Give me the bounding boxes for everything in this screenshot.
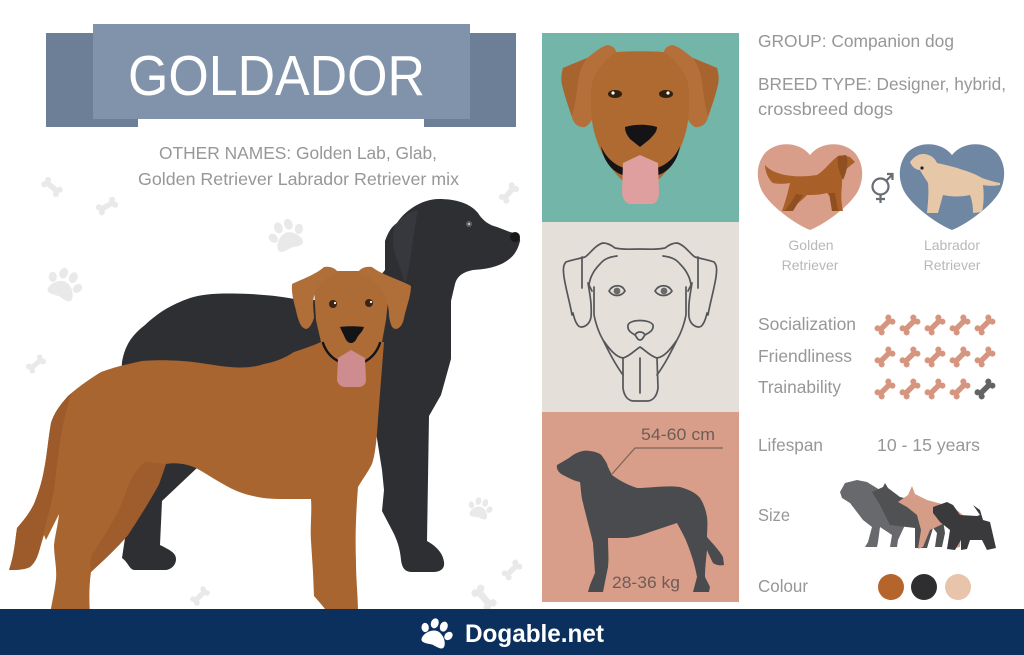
eye pupils xyxy=(614,288,667,294)
lifespan xyxy=(758,435,980,455)
tongue xyxy=(622,155,659,204)
breed type text: BREED TYPE: Designer, hybrid, xyxy=(758,74,1006,94)
large dog xyxy=(840,480,905,547)
panel: outline face xyxy=(542,222,739,412)
mouth xyxy=(323,343,380,362)
size row xyxy=(758,480,996,550)
trainability rating: Trainability xyxy=(758,377,841,397)
icon: male female symbol xyxy=(872,174,892,203)
tongue xyxy=(623,358,658,401)
head outline xyxy=(563,243,717,327)
lifespan: 10 - 15 years xyxy=(877,435,980,455)
nose xyxy=(510,232,520,242)
title banner xyxy=(46,24,516,127)
breed type text: crossbreed dogs xyxy=(758,99,893,119)
label xyxy=(924,237,981,273)
group text: GROUP: Companion dog xyxy=(758,31,954,51)
height leader line xyxy=(612,448,723,474)
second dog xyxy=(872,483,945,548)
ear folds xyxy=(582,256,698,291)
eyes xyxy=(329,299,373,308)
head xyxy=(314,271,389,364)
colour row: Colour xyxy=(758,576,808,596)
label xyxy=(782,237,839,273)
other names text: Golden Retriever Labrador Retriever mix xyxy=(138,169,459,189)
tongue xyxy=(337,350,366,387)
size row: Size xyxy=(758,505,790,525)
footer bar xyxy=(0,609,1024,655)
panel: size and weight xyxy=(542,412,739,602)
nose xyxy=(340,326,364,343)
icon: footer paw xyxy=(415,614,458,651)
height label: 54-60 cm xyxy=(641,425,715,444)
label: Retriever xyxy=(782,257,839,273)
friendliness rating: Friendliness xyxy=(758,346,852,366)
eye xyxy=(466,221,472,227)
other names text xyxy=(138,143,459,189)
dog silhouette xyxy=(557,451,724,592)
ears xyxy=(561,45,719,127)
head xyxy=(591,51,689,183)
right ear xyxy=(358,267,411,329)
pink dog xyxy=(898,486,963,549)
panel: teal face xyxy=(542,33,739,222)
face and jaw xyxy=(594,287,686,375)
illustration: brown dog xyxy=(9,267,411,614)
trainability rating xyxy=(758,377,997,401)
label: Labrador xyxy=(924,237,980,253)
socialization rating: Socialization xyxy=(758,314,856,334)
nose xyxy=(628,320,653,340)
small dark dog xyxy=(933,502,996,550)
socialization rating xyxy=(758,313,997,337)
title: GOLDADOR xyxy=(128,44,425,108)
breed type text xyxy=(758,74,1006,119)
mouth xyxy=(601,146,680,175)
parent: labrador retriever xyxy=(900,144,1004,273)
weight label: 28-36 kg xyxy=(612,573,680,592)
other names text: OTHER NAMES: Golden Lab, Glab, xyxy=(159,143,437,163)
footer brand: Dogable.net xyxy=(465,620,605,648)
nose xyxy=(625,125,657,147)
lifespan: Lifespan xyxy=(758,435,823,455)
illustration: black dog xyxy=(120,199,520,572)
left ear xyxy=(292,267,338,329)
friendliness rating xyxy=(758,345,997,369)
colour row xyxy=(758,574,971,600)
eyes xyxy=(609,286,672,296)
eyes xyxy=(608,90,673,98)
label: Retriever xyxy=(924,257,981,273)
parent: golden retriever xyxy=(758,144,862,273)
nose xyxy=(920,166,924,170)
background paws and bones xyxy=(25,176,524,613)
label: Golden xyxy=(788,237,834,253)
